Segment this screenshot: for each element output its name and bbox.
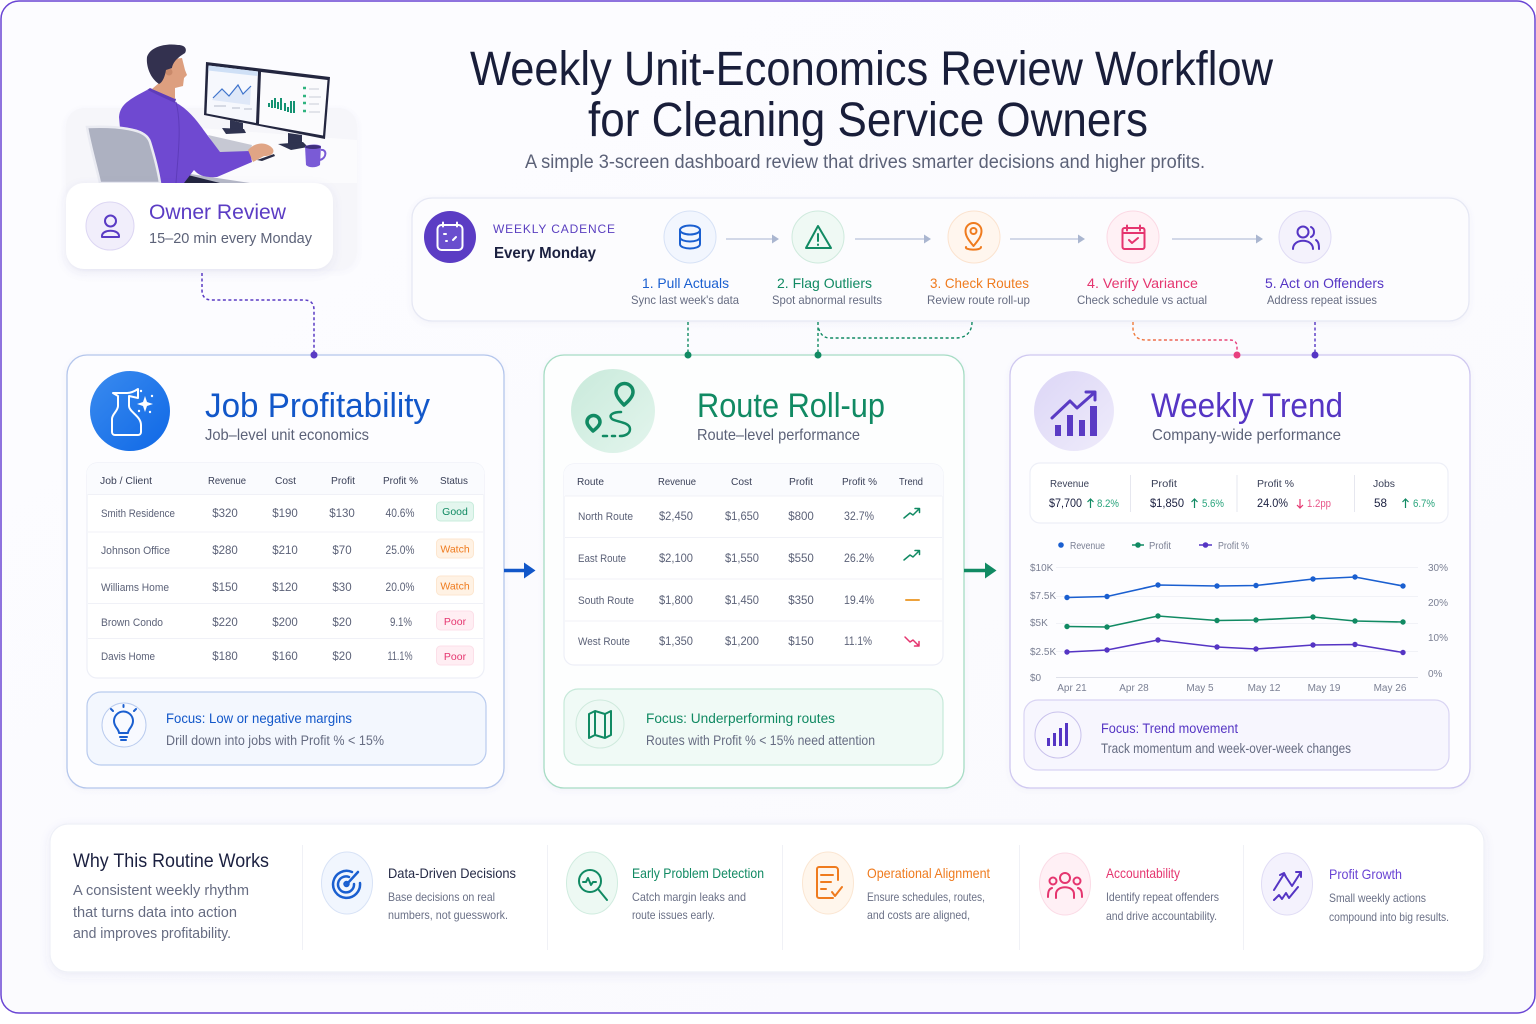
owner card text: Owner Review <box>149 201 287 224</box>
table: routes: South Route <box>578 595 634 607</box>
table: jobs: 20.0% <box>386 582 414 594</box>
chart legend <box>1058 541 1249 552</box>
table: jobs: $160 <box>272 651 298 663</box>
benefit: accountability: Identify repeat offenders <box>1106 890 1219 904</box>
kpi strip: Jobs <box>1373 478 1395 490</box>
arrow: job to route <box>504 562 536 578</box>
table: routes: East Route <box>578 553 626 565</box>
arrow <box>855 234 931 244</box>
table: jobs: $120 <box>272 582 298 594</box>
table: routes: $1,200 <box>725 636 759 648</box>
table: jobs <box>87 463 484 678</box>
table: jobs: Smith Residence <box>101 508 175 520</box>
panel: weekly trend <box>1010 355 1470 788</box>
table: jobs: Johnson Office <box>101 545 170 557</box>
kpi strip: $7,700 <box>1049 496 1082 510</box>
table: jobs: $280 <box>212 545 238 557</box>
line chart: $2.5K <box>1030 647 1056 658</box>
line chart: 20% <box>1428 598 1448 609</box>
line chart: May 5 <box>1186 683 1214 694</box>
line chart: $7.5K <box>1030 591 1056 602</box>
table: jobs: $30 <box>332 582 352 594</box>
table: routes <box>564 464 943 665</box>
heading <box>1151 387 1343 444</box>
icon: growth bars <box>1034 371 1114 451</box>
panel: weekly cadence <box>412 198 1469 321</box>
callout: route focus: Routes with Profit % < 15% need attention <box>646 733 875 748</box>
kpi strip: 1.2pp <box>1307 498 1331 510</box>
table: routes: Route <box>577 476 604 488</box>
benefit: data-driven decisions: numbers, not guesswork. <box>388 908 508 922</box>
table: routes: West Route <box>578 636 630 648</box>
table: jobs: 9.1% <box>390 617 412 629</box>
benefit: accountability <box>1040 853 1219 923</box>
table: routes: $1,550 <box>725 553 759 565</box>
benefit: early problem detection: Catch margin leaks and <box>632 890 746 904</box>
benefit: profit growth: Small weekly actions <box>1329 891 1426 905</box>
line chart: 0% <box>1428 669 1443 680</box>
table: jobs: $130 <box>329 508 355 520</box>
benefit: accountability: Accountability <box>1106 865 1180 881</box>
line chart <box>1030 563 1448 694</box>
benefit: data-driven decisions <box>322 852 516 922</box>
heading: Route–level performance <box>697 427 860 444</box>
table: routes: $800 <box>788 511 814 523</box>
benefit: data-driven decisions: Base decisions on real <box>388 890 495 904</box>
step 2: 2. Flag Outliers <box>777 275 872 291</box>
heading: Route Roll-up <box>697 387 885 425</box>
table: routes: Profit <box>789 476 813 488</box>
heading <box>697 387 885 444</box>
owner card text: 15–20 min every Monday <box>149 230 312 247</box>
callout: trend focus: Focus: Trend movement <box>1101 721 1238 736</box>
step 1: 1. Pull Actuals <box>642 275 729 291</box>
owner card text <box>149 201 312 247</box>
kpi strip: Revenue <box>1050 478 1089 490</box>
callout: job focus <box>87 692 486 765</box>
heading: Job–level unit economics <box>205 427 369 444</box>
icon: person <box>86 202 134 250</box>
callout: job focus: Focus: Low or negative margins <box>166 711 352 726</box>
table: jobs: Profit % <box>383 475 418 487</box>
benefit: operational alignment <box>802 852 990 922</box>
table: routes: $2,100 <box>659 553 693 565</box>
heading: Job Profitability <box>205 387 430 425</box>
chart legend: Profit % <box>1218 541 1249 552</box>
kpi strip: Profit % <box>1257 478 1294 490</box>
table: jobs: $20 <box>332 617 352 629</box>
line chart: $10K <box>1030 563 1054 574</box>
step 5: Address repeat issues <box>1267 293 1377 307</box>
table: jobs: Status <box>440 475 468 487</box>
intro text: A consistent weekly rhythm <box>73 882 249 899</box>
table: jobs: $180 <box>212 651 238 663</box>
table: jobs: Cost <box>275 475 296 487</box>
owner card <box>66 183 333 269</box>
callout: route focus <box>564 689 943 765</box>
benefit: profit growth: Profit Growth <box>1329 866 1402 882</box>
heading: Company-wide performance <box>1152 427 1341 444</box>
connector: owner to job profitability <box>202 273 318 358</box>
series: revenue <box>1064 574 1406 600</box>
arrow <box>1172 234 1263 244</box>
owner review block <box>66 44 357 269</box>
table: jobs: $320 <box>212 508 238 520</box>
table: jobs: $220 <box>212 617 238 629</box>
kpi strip: Profit <box>1151 478 1177 490</box>
table: jobs: $190 <box>272 508 298 520</box>
table: routes: $2,450 <box>659 511 693 523</box>
benefit: operational alignment: and costs are aligned, <box>867 908 970 922</box>
series: profit <box>1064 613 1406 630</box>
table: routes: 32.7% <box>844 511 874 523</box>
step 3: Review route roll-up <box>927 293 1030 307</box>
step 4: Check schedule vs actual <box>1077 293 1207 307</box>
status badges <box>436 502 474 665</box>
benefit: accountability: and drive accountability. <box>1106 909 1217 923</box>
table: jobs: Profit <box>331 475 355 487</box>
status badges: Good <box>442 506 468 518</box>
kpi strip: 58 <box>1374 496 1387 510</box>
icon: route map <box>571 369 655 453</box>
line chart: May 19 <box>1308 683 1341 694</box>
line chart: 10% <box>1428 633 1448 644</box>
benefit: early problem detection <box>566 852 764 922</box>
table: routes: Cost <box>731 476 752 488</box>
line chart: $5K <box>1030 618 1048 629</box>
step 1 <box>631 211 739 307</box>
table: jobs: Davis Home <box>101 651 155 663</box>
kpi strip: 8.2% <box>1097 498 1119 510</box>
table: jobs: $20 <box>332 651 352 663</box>
callout: job focus: Drill down into jobs with Profit % < 15% <box>166 733 384 748</box>
cadence label: Every Monday <box>494 245 596 262</box>
step 2 <box>772 211 882 307</box>
step 4 <box>1077 211 1207 307</box>
arrow <box>726 234 779 244</box>
table: jobs: 25.0% <box>386 545 414 557</box>
cadence label: WEEKLY CADENCE <box>493 222 615 236</box>
step 1: Sync last week's data <box>631 293 739 307</box>
table: routes: North Route <box>578 511 633 523</box>
table: jobs: $150 <box>212 582 238 594</box>
table: routes: $1,650 <box>725 511 759 523</box>
table: routes: Revenue <box>658 476 696 488</box>
table: routes: Profit % <box>842 476 877 488</box>
intro text: Why This Routine Works <box>73 851 269 872</box>
table: routes: $1,350 <box>659 636 693 648</box>
callout: trend focus: Track momentum and week-over-week changes <box>1101 741 1351 756</box>
illustration: owner at desk <box>87 44 357 183</box>
title <box>470 43 1273 147</box>
subtitle: A simple 3-screen dashboard review that drives smarter decisions and higher profits. <box>525 152 1205 173</box>
step 3: 3. Check Routes <box>930 275 1029 291</box>
heading <box>205 387 430 444</box>
table: routes: 19.4% <box>844 595 874 607</box>
line chart: 30% <box>1428 563 1448 574</box>
table: jobs: Williams Home <box>101 582 169 594</box>
heading: Weekly Trend <box>1151 387 1343 425</box>
benefit: early problem detection: Early Problem Detection <box>632 865 764 881</box>
table: routes: $1,450 <box>725 595 759 607</box>
title: Weekly Unit-Economics Review Workflow <box>470 43 1273 96</box>
cadence label <box>493 222 615 262</box>
benefit: operational alignment: Ensure schedules, routes, <box>867 890 985 904</box>
table: jobs: Job / Client <box>100 475 152 487</box>
callout: trend focus <box>1024 700 1449 770</box>
step 4: 4. Verify Variance <box>1087 275 1198 291</box>
table: jobs: $210 <box>272 545 298 557</box>
kpi strip <box>1030 463 1448 523</box>
connector dots <box>310 352 1318 358</box>
status badges: Watch <box>440 544 470 556</box>
panel: why this routine works <box>50 824 1484 972</box>
line chart: May 12 <box>1248 683 1281 694</box>
line chart: Apr 21 <box>1057 683 1087 694</box>
table: jobs: $200 <box>272 617 298 629</box>
arrow <box>1010 234 1085 244</box>
status badges: Watch <box>440 580 470 592</box>
line chart: $0 <box>1030 673 1042 684</box>
kpi strip: $1,850 <box>1150 496 1184 510</box>
panel: route roll-up <box>544 355 964 788</box>
table: jobs: 40.6% <box>386 508 414 520</box>
kpi strip: 6.7% <box>1413 498 1435 510</box>
chart legend: Revenue <box>1070 541 1105 552</box>
step 2: Spot abnormal results <box>772 293 882 307</box>
benefit: profit growth <box>1262 853 1449 924</box>
benefit: operational alignment: Operational Alignment <box>867 865 990 881</box>
table: routes: 11.1% <box>844 636 872 648</box>
panel: job profitability <box>67 355 504 788</box>
status badges: Poor <box>444 651 467 663</box>
step 5: 5. Act on Offenders <box>1265 275 1384 291</box>
intro text: that turns data into action <box>73 904 237 921</box>
callout: route focus: Focus: Underperforming routes <box>646 711 835 726</box>
series: profit percent <box>1064 637 1406 655</box>
line chart: May 26 <box>1374 683 1407 694</box>
intro text: and improves profitability. <box>73 925 231 942</box>
icon: spray bottle <box>90 371 170 451</box>
trend icons <box>904 508 920 646</box>
table: routes: Trend <box>899 476 923 488</box>
arrow: route to trend <box>964 562 996 578</box>
table: routes: 26.2% <box>844 553 874 565</box>
kpi strip: 24.0% <box>1257 496 1288 510</box>
kpi strip: 5.6% <box>1202 498 1224 510</box>
table: jobs: Brown Condo <box>101 617 163 629</box>
line chart: Apr 28 <box>1119 683 1149 694</box>
title: for Cleaning Service Owners <box>588 94 1148 147</box>
table: routes: $150 <box>788 636 814 648</box>
step 5 <box>1265 211 1384 307</box>
connectors: cadence to panels <box>688 322 1315 355</box>
table: routes: $550 <box>788 553 814 565</box>
chart legend: Profit <box>1149 541 1171 552</box>
benefit: data-driven decisions: Data-Driven Decisions <box>388 865 516 881</box>
table: routes: $350 <box>788 595 814 607</box>
icon: calendar <box>424 211 476 263</box>
benefit: profit growth: compound into big results. <box>1329 910 1449 924</box>
table: routes: $1,800 <box>659 595 693 607</box>
status badges: Poor <box>444 616 467 628</box>
intro text <box>73 851 269 942</box>
table: jobs: 11.1% <box>388 651 412 663</box>
step 3 <box>927 211 1030 307</box>
benefit: early problem detection: route issues early. <box>632 908 715 922</box>
table: jobs: $70 <box>332 545 352 557</box>
table: jobs: Revenue <box>208 475 246 487</box>
